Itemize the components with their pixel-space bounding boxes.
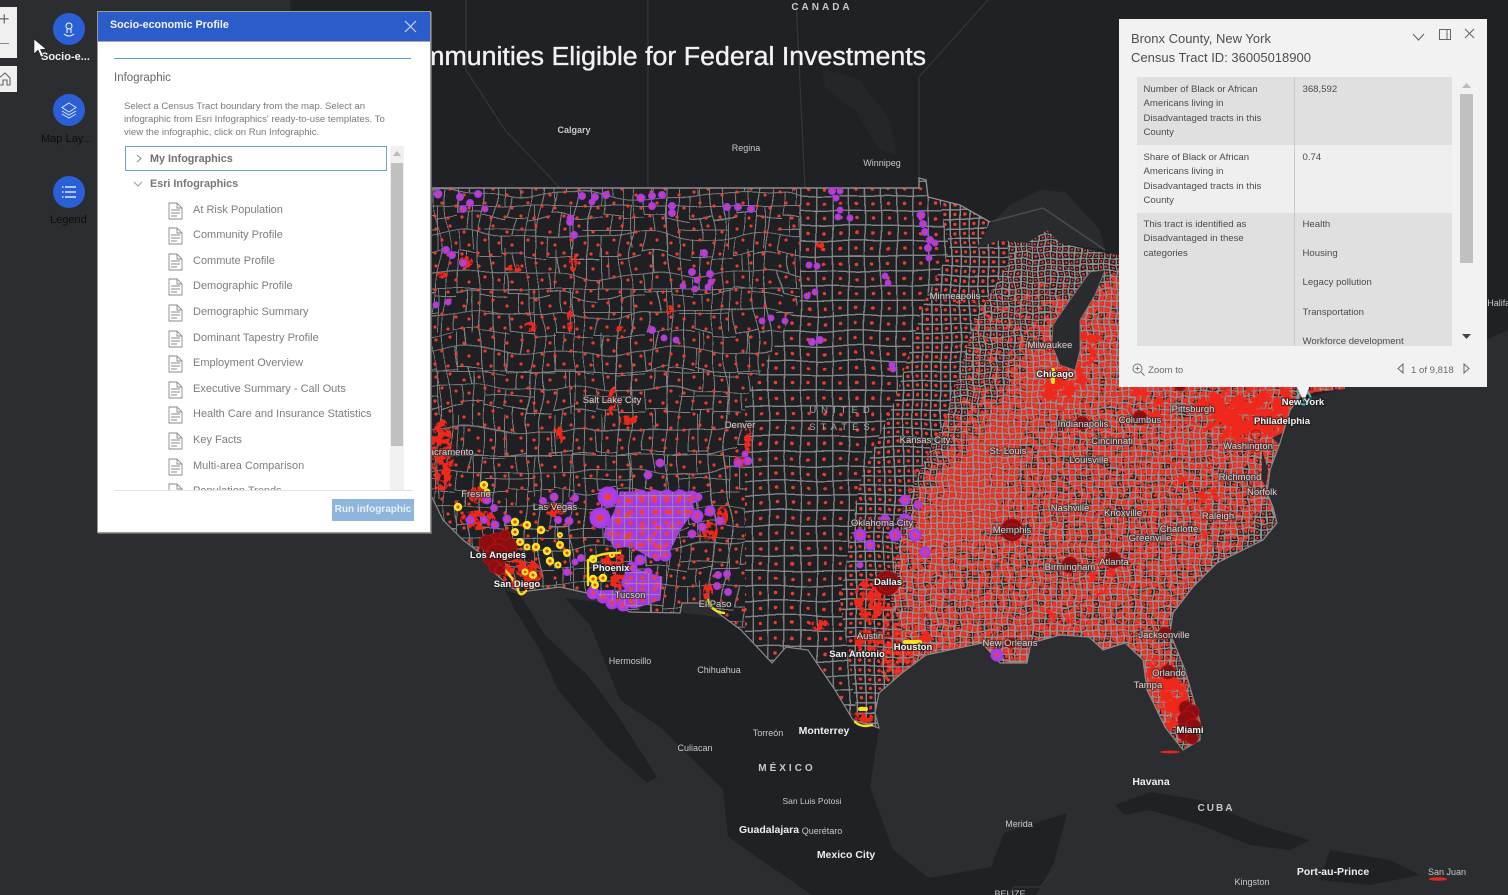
place labels: Chicago [1036,369,1074,380]
template list: Demographic Summary [193,306,309,318]
place labels: Cincinnati [1091,436,1133,447]
place labels: Los Angeles [470,550,526,561]
row value: 368,592 [1302,84,1337,95]
table row: number of Black or African Americans [1137,77,1452,145]
place labels: Las Vegas [533,502,577,513]
place labels: Tucson [615,590,645,601]
place labels: Raleigh [1202,511,1234,522]
place labels: Oklahoma City [851,518,913,529]
widget button: Legend [50,176,87,226]
place labels: Fresno [461,489,491,500]
place labels: Culiacan [677,743,713,753]
place labels: Denver [725,420,755,431]
icon: profile pin [53,13,85,45]
instructions text: infographic from Esri Infographics' ready-to-use templates. To [124,114,385,125]
popup scrollbar [1460,83,1473,339]
icon: collapse [1412,34,1424,41]
tract grid over the purple southwest [594,492,694,608]
place labels: Chihuahua [697,665,741,675]
lakes: Michigan, Superior and Chesapeake [977,190,1284,487]
place labels: Washington [1223,441,1273,452]
choropleth: disadvantaged tract density [870,250,1400,770]
row field: categories [1144,248,1188,259]
place labels: Birmingham [1045,562,1095,573]
instructions text [124,100,385,138]
table row: disadvantaged categories [1137,213,1452,346]
place labels: Knoxville [1104,508,1142,519]
place labels: STATES [809,422,875,433]
place labels: San Antonio [829,649,885,660]
place labels: Austin [857,631,883,642]
place labels: San Juan [1428,867,1466,877]
place labels: Sacramento [422,447,474,458]
purple markers: southwest and northern plains [433,188,1003,661]
place labels: Greenville [1129,533,1171,544]
solid red metropolitan clusters [430,240,1330,750]
label: Legend [50,214,87,226]
county boundaries with tract dots: east [890,230,1345,750]
label: Socio-e... [41,51,90,63]
place labels: Pittsburgh [1172,404,1214,415]
national outline [432,178,990,222]
icon: dock [1439,29,1451,40]
place labels: Memphis [993,525,1032,536]
place labels: Port-au-Prince [1297,866,1369,878]
row field: Disadvantaged in these [1144,233,1244,244]
place labels: Calgary [557,125,591,135]
county boundaries with tract dots: west [432,188,800,628]
template list: At Risk Population [193,204,283,216]
red islands: Puerto Rico and Florida Keys [1160,751,1447,881]
pagination [1397,363,1470,376]
Canada province borders and shaded lakes [466,0,1056,895]
place labels: Phoenix [593,563,630,574]
place labels: CANADA [791,2,853,13]
row values: Health [1302,219,1330,230]
dark red circles: Los Angeles, Dallas, Memphis, Miami and other metros [479,341,1261,744]
western red clusters [430,240,886,724]
template list: Key Facts [193,434,242,446]
row field [1144,84,1261,138]
template list: Dominant Tapestry Profile [193,332,319,344]
scroll thumb [391,163,403,446]
zoom controls [0,7,17,58]
section heading: Infographic [114,72,171,84]
attribute table [1137,77,1452,346]
place labels: Querétaro [802,826,842,836]
place labels: San Luis Potosi [782,796,842,806]
place labels: Milwaukee [1028,340,1072,351]
row values: Transportation [1302,307,1364,318]
row field: Americans living in [1144,98,1223,109]
place labels: St. Louis [990,446,1027,457]
place labels: New Orleans [983,638,1038,649]
scroll thumb [1460,94,1473,263]
yellow outline areas [505,370,1053,726]
place labels: Tampa [1134,680,1163,691]
place labels: Nashville [1051,503,1089,514]
place labels: Kingston [1234,877,1270,887]
place labels: Atlanta [1099,557,1130,568]
button: Run infographic [332,499,414,521]
icon: next [1464,363,1470,374]
place labels: Columbus [1119,415,1162,426]
place labels: Miami [1177,725,1203,736]
place labels: Monterrey [799,725,850,737]
place labels: Norfolk [1247,487,1277,498]
shaded lake Winnipeg [822,68,897,155]
place labels: Houston [894,642,932,653]
place labels: Dallas [874,577,902,588]
template list: Demographic Profile [193,280,293,292]
place labels: San Diego [494,579,540,590]
icon: previous [1397,363,1404,374]
row field: Disadvantaged tracts in this [1144,181,1261,192]
instructions text: Select a Census Tract boundary from the map. Select an [124,100,365,112]
place labels: Philadelphia [1254,416,1311,427]
place labels: Havana [1132,776,1170,788]
button: Run infographic: Run infographic [335,504,411,515]
widget button: Socio-economic [41,13,90,63]
yellow markers: California and Arizona [454,481,615,589]
icon: zoom to [1132,364,1145,376]
template list: Health Care and Insurance Statistics [193,408,372,420]
template list: Community Profile [193,229,283,241]
zoom to label: Zoom to [1148,365,1183,376]
place labels: Kansas City [900,435,951,446]
feature count: 1 of 9,818 [1411,365,1454,376]
row field [1144,152,1261,206]
tree row: Esri Infographics [134,178,238,190]
county base: contiguous United States [432,100,1400,750]
popup heading [1131,31,1311,65]
place labels: Jacksonville [1138,630,1190,641]
popup: Bronx County census tract [1119,19,1487,387]
place labels: Mexico City [817,849,875,861]
popup heading: Census Tract ID: 36005018900 [1131,50,1311,65]
row field: Disadvantaged tracts in this [1144,113,1261,124]
place labels: Torreón [753,728,783,738]
row values [1302,219,1404,346]
row values: Housing [1302,248,1338,259]
panel heading: Socio-economic Profile [110,19,229,31]
icon: zoom out [0,43,9,44]
widget button: Map Layers [41,94,92,145]
home button [0,66,17,92]
tree row: My Infographics [125,146,387,171]
template list [168,202,372,490]
chevron [134,182,142,187]
row field: Number of Black or African [1144,84,1258,95]
icon: legend list [53,176,85,208]
icon: mouse cursor [34,38,46,57]
place labels: Orlando [1152,668,1186,679]
row field: Americans living in [1144,166,1223,177]
place labels: Salt Lake City [583,395,642,406]
template list: Commute Profile [193,255,275,267]
divider rule [114,58,411,59]
row values: Legacy pollution [1302,277,1372,288]
footer rule [114,490,413,491]
row field: County [1144,195,1174,206]
place labels: Richmond [1219,472,1261,483]
county boundaries with tract dots: transition [840,200,1010,727]
place labels: Guadalajara [739,824,799,836]
column divider [1294,77,1295,346]
place labels: Merida [1005,819,1033,829]
scroll arrow down [1462,334,1471,339]
scroll arrow [393,151,401,156]
row field: Share of Black or African [1144,152,1249,163]
row field: County [1144,127,1174,138]
place labels: Charlotte [1160,524,1198,535]
place labels: CUBA [1198,803,1234,814]
place labels [422,2,1508,895]
row label: Esri Infographics [150,178,238,190]
place labels: Louisville [1069,455,1109,466]
row label: My Infographics [150,153,233,165]
marker: selected feature pin at New York [1297,387,1310,404]
row field [1144,219,1246,259]
row value: 0.74 [1302,152,1321,163]
place labels: Hermosillo [609,656,651,666]
place labels: El Paso [699,599,731,610]
icon: home [0,72,11,86]
panel: Socio-economic Profile [97,11,431,533]
place labels: Indianapolis [1058,419,1109,430]
map title: Communities Eligible for Federal Investments [388,43,926,71]
county boundaries with tract dots: plains [745,180,948,714]
label: Map Lay... [41,133,92,145]
place labels: MÉXICO [758,761,816,774]
chevron [136,154,142,162]
place labels: Regina [732,143,760,153]
popup heading: Bronx County, New York [1131,31,1271,46]
scroll arrow up [1462,83,1471,88]
icon: close [1464,28,1474,38]
panel header [98,12,430,42]
place labels: Minneapolis [930,291,981,302]
row field: This tract is identified as [1144,219,1246,230]
icon: close [404,20,416,32]
instructions text: view the infographic, click on Run Infographic. [124,127,319,138]
template list: Multi-area Comparison [193,460,304,472]
icon: layers [53,94,85,126]
place labels: UNITED [809,405,875,416]
place labels: New York [1282,397,1325,408]
template list: Executive Summary - Call Outs [193,383,346,395]
table row: share of Black or African Americans [1137,145,1452,213]
list scrollbar [390,146,404,490]
template list: Employment Overview [193,357,303,369]
place labels: Winnipeg [863,158,901,168]
